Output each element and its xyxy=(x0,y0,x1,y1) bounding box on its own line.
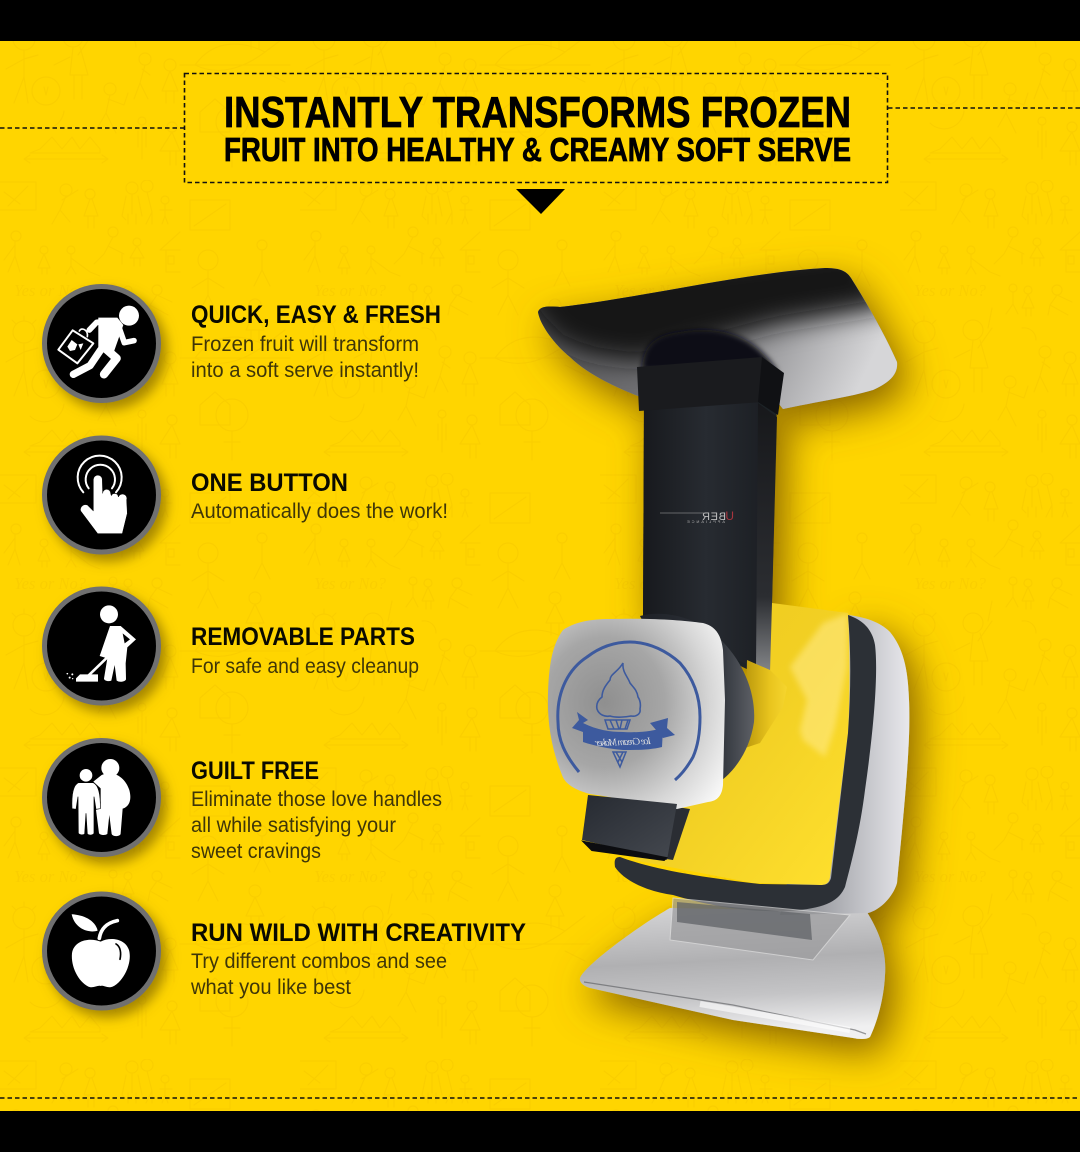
waffle cone top xyxy=(605,720,630,729)
product photo: soft serve machine xyxy=(510,240,909,1039)
back dark rubber band xyxy=(615,615,876,911)
back grey shell xyxy=(780,615,909,915)
tray neck xyxy=(642,330,778,372)
brand logo on column xyxy=(660,509,734,524)
feature: guilt free: sweet cravings xyxy=(191,840,321,863)
bottom black band xyxy=(0,1111,1080,1152)
arrow pointing down xyxy=(516,189,565,214)
nozzle xyxy=(582,795,677,860)
waffle cone tip xyxy=(613,752,626,767)
collar xyxy=(637,357,762,411)
dome behind faceplate xyxy=(640,614,754,780)
brand logo on column: BER xyxy=(702,511,726,523)
icon: finger pressing button xyxy=(44,438,158,552)
feature: removable parts xyxy=(44,589,419,703)
feature: guilt free: all while satisfying your xyxy=(191,814,396,837)
ice cream logo xyxy=(558,642,700,780)
feature: guilt free xyxy=(44,740,442,863)
base highlight stripe xyxy=(584,982,866,1034)
swirl xyxy=(597,663,640,717)
heading: QUICK, EASY & FRESH xyxy=(191,301,441,329)
column front xyxy=(643,400,758,668)
heading: ONE BUTTON xyxy=(191,469,348,497)
title line 1: INSTANTLY TRANSFORMS FROZEN xyxy=(224,88,851,137)
description: Automatically does the work! xyxy=(191,500,448,523)
icon: thin and heavy person xyxy=(44,740,158,854)
description: For safe and easy cleanup xyxy=(191,655,419,678)
feature: creativity: what you like best xyxy=(190,976,351,999)
logo ring xyxy=(558,642,700,780)
title line 2: FRUIT INTO HEALTHY & CREAMY SOFT SERVE xyxy=(224,131,851,168)
brand logo on column: U xyxy=(725,509,734,523)
heading: RUN WILD WITH CREATIVITY xyxy=(191,919,526,947)
feature: quick, easy and fresh: into a soft serve instantly! xyxy=(191,359,419,382)
yellow highlight xyxy=(790,613,848,757)
feature: creativity xyxy=(44,894,526,1008)
nozzle side xyxy=(660,806,690,860)
description: Try different combos and see xyxy=(191,950,447,973)
nozzle opening xyxy=(584,842,666,860)
yellow neck xyxy=(745,660,787,748)
description: Frozen fruit will transform xyxy=(191,333,419,356)
description: Eliminate those love handles xyxy=(191,788,442,811)
tray shaded surface xyxy=(538,268,898,409)
icon: apple xyxy=(44,894,158,1008)
heading: REMOVABLE PARTS xyxy=(191,623,415,651)
banner script: Ice Cream Maker xyxy=(595,736,652,749)
column shadow caster xyxy=(643,400,777,680)
clear support box xyxy=(670,898,850,960)
banner xyxy=(572,712,675,738)
base tray xyxy=(580,908,885,1039)
top black band xyxy=(0,0,1080,41)
icon: runner with shopping bag xyxy=(44,286,158,400)
machine silhouette with shadow xyxy=(538,268,909,1039)
title box xyxy=(184,74,888,182)
feature: quick, easy and fresh xyxy=(44,286,441,400)
brand logo on column: APPLIANCE xyxy=(687,519,725,524)
tray silhouette xyxy=(538,268,897,409)
heading: GUILT FREE xyxy=(191,757,319,785)
icon: person sweeping xyxy=(44,589,158,703)
yellow housing xyxy=(633,603,850,885)
feature: one button xyxy=(44,438,448,552)
column side xyxy=(756,403,777,680)
silver faceplate xyxy=(548,619,725,809)
